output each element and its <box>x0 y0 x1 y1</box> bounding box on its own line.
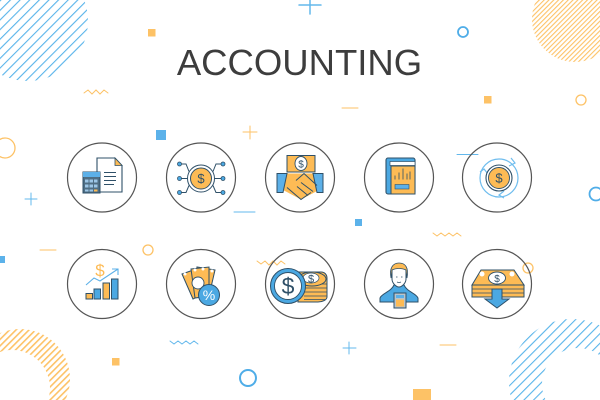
icon ring: growth bar chart: $ <box>95 261 105 280</box>
icon ring: accountant with calculator <box>364 250 434 318</box>
icon ring: accounting book <box>364 143 434 212</box>
icon ring: money stack with down arrow: $ <box>494 274 500 285</box>
icon ring: circulating dollar coin: $ <box>495 170 503 186</box>
icon ring: banknotes with percent badge <box>166 250 236 318</box>
icon ring: coin stack: $ <box>282 273 295 299</box>
icon ring: calculator and document <box>68 143 136 212</box>
decoration: blue hatched ring bottom right <box>509 319 600 400</box>
icon ring: handshake and banknote: $ <box>298 160 304 170</box>
icon ring: coin stack <box>266 250 334 318</box>
icon ring: money stack with down arrow <box>462 250 532 318</box>
icon ring: dollar network: $ <box>197 171 205 186</box>
icon ring: dollar network <box>166 143 236 212</box>
icon ring: handshake and banknote <box>266 143 334 212</box>
decoration: orange hatched ring bottom left <box>0 329 70 400</box>
icon ring: coin stack: $ <box>308 274 314 286</box>
icon ring: circulating dollar coin <box>462 143 532 212</box>
decoration: orange hatched circle top right <box>532 0 600 62</box>
decoration: blue hatched circle top left <box>0 0 88 81</box>
icon ring: banknotes with percent badge: % <box>203 287 215 303</box>
title: ACCOUNTING <box>177 42 422 83</box>
icon ring: growth bar chart <box>68 250 136 318</box>
